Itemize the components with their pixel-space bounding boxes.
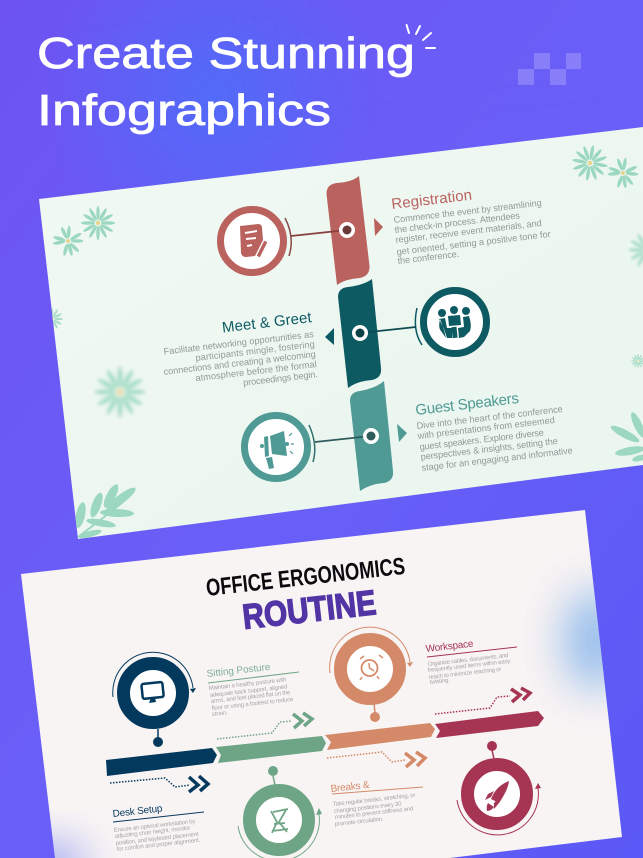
band: dark teal segment [338, 279, 381, 388]
underline: sitting posture [208, 672, 299, 683]
step: breaks circle [330, 627, 413, 722]
title: routine: ROUTINE [241, 583, 378, 637]
connector dot: guest speakers [363, 428, 379, 444]
text: registration body: the check-in process. Attendees [394, 210, 521, 235]
text: sitting posture body: floor or using a footrest to reduce [212, 697, 294, 712]
text: workspace body: twisting. [430, 678, 450, 686]
step: workspace circle [457, 741, 541, 835]
text: registration body: Commence the event by streamlining [393, 198, 542, 225]
text: guest speakers body: Dive into the heart of the conference [416, 404, 563, 431]
arrow: registration [374, 218, 383, 236]
text: meet and greet body: atmosphere before the formal [195, 359, 317, 383]
step: desk setup circle [113, 652, 196, 747]
text: registration body: the conference. [397, 249, 460, 266]
text: workspace body: reach to minimize reaching or [429, 667, 502, 681]
icon circle: registration [220, 210, 347, 272]
heading: workspace: Workspace [425, 639, 474, 655]
text: sitting posture body: strain. [212, 710, 228, 718]
underline: breaks [332, 787, 423, 794]
text: breaks body [333, 793, 416, 828]
text: sitting posture body: Maintain a healthy posture with [209, 677, 287, 692]
band: teal segment [350, 381, 393, 491]
title: office ergonomics: OFFICE ERGONOMICS [205, 553, 406, 602]
heading: breaks: Breaks & [330, 780, 370, 795]
text: guest speakers body: with presentations from esteemed [416, 415, 555, 441]
underline: desk setup [113, 812, 204, 822]
text: meet and greet body: proceedings begin. [243, 369, 318, 388]
text: workspace body: Organize cables, documents, and [428, 653, 509, 668]
heading: registration: Registration [390, 187, 473, 213]
dotted arrow: workspace [435, 688, 530, 714]
arrow: guest speakers [397, 424, 407, 442]
icon: sparkle lines [407, 25, 435, 48]
text: sitting posture body [209, 677, 294, 718]
decorative blurred glows [15, 590, 628, 858]
connector dot: registration [339, 222, 355, 238]
text: breaks body: promote circulation. [335, 817, 384, 828]
heading: guest speakers: Guest Speakers [414, 390, 520, 419]
arrow: meet and greet [325, 328, 334, 345]
text: workspace body [428, 653, 511, 686]
heading: meet and greet: Meet & Greet [221, 309, 313, 336]
text: breaks body: minutes to prevent stiffness and [335, 806, 414, 821]
text: breaks body: Take regular breaks, stretching, or [333, 793, 416, 808]
title [37, 29, 415, 135]
text: sitting posture body: adequate back support, aligned [210, 684, 288, 699]
underline: workspace [427, 647, 517, 657]
band: red segment [326, 176, 370, 285]
text: guest speakers body: guest speakers. Explore diverse [419, 427, 544, 452]
text: desk setup body: for comfort and proper alignment. [117, 838, 201, 853]
text: meet and greet body: connections and creating a welcoming [163, 349, 316, 377]
text: workspace body: frequently used items within easy [428, 659, 511, 674]
text: guest speakers body [416, 404, 573, 473]
decorative flowers and leaves [41, 142, 643, 540]
panel: conference timeline [39, 127, 643, 540]
text: registration body [393, 198, 551, 266]
dotted arrow: breaks [327, 752, 425, 767]
icon circle: guest speakers [244, 416, 371, 478]
text: meet and greet body [163, 329, 318, 388]
text: desk setup body: position, and keyboard placement [116, 832, 199, 847]
icon circle: meet and greet [360, 290, 486, 354]
text: desk setup body: Ensure an optimal workstation by [114, 819, 196, 834]
text: desk setup body [114, 819, 201, 853]
dotted arrow: sitting posture [217, 713, 312, 739]
heading: desk setup: Desk Setup [112, 803, 163, 820]
icon: pixel squares [518, 53, 581, 85]
title: Infographics [37, 86, 331, 135]
text: breaks body: changing positions every 30 [334, 801, 402, 815]
title: Create Stunning [37, 29, 415, 78]
connector dot: meet and greet [352, 325, 368, 341]
text: guest speakers body: perspectives & insights, setting the [420, 436, 558, 462]
text: guest speakers body: stage for an engaging and informative [421, 445, 573, 473]
panel: office ergonomics routine [15, 510, 628, 858]
step: sitting posture circle [238, 766, 322, 858]
text: registration body: register, receive event materials, and [395, 218, 542, 245]
text: registration body: get oriented, setting a positive tone for [396, 229, 551, 257]
text: sitting posture body: arms, and feet placed flat on the [211, 690, 291, 705]
timeline arrow segments [106, 711, 544, 776]
heading: sitting posture: Sitting Posture [206, 662, 271, 680]
text: meet and greet body: participants mingle, fostering [195, 339, 315, 363]
text: desk setup body: adjusting chair height, monitor [115, 826, 191, 840]
text: meet and greet body: Facilitate networking opportunities as [163, 329, 315, 357]
dotted arrow: desk setup [110, 776, 208, 792]
